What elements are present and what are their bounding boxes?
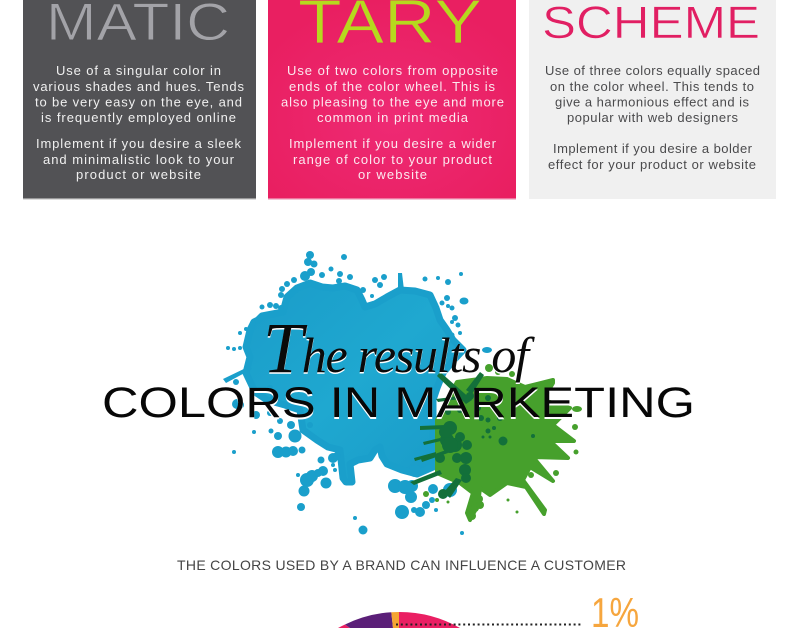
pie slice: pink (399, 612, 460, 628)
text block: complementary description: range of color to your product (293, 152, 492, 167)
icon: dark green overlap marks (410, 372, 535, 499)
icon: green paint splat (423, 364, 582, 520)
text block: monochromatic description (33, 63, 244, 182)
pie slice: orange 1% (391, 612, 399, 628)
text block: monochromatic description: is frequently employed online (41, 110, 236, 125)
pie slice: pink left edge (338, 624, 350, 628)
panel: complementary (268, 0, 516, 200)
text block: complementary description: also pleasing to the eye and more (281, 94, 504, 110)
text block: complementary description: common in print media (317, 110, 469, 125)
text block: triadic description: Implement if you desire a bolder (553, 141, 753, 156)
title script line: The results of: The results of (263, 310, 535, 390)
dotted leader line (396, 624, 581, 626)
text block: monochromatic description: Implement if you desire a sleek (36, 136, 242, 151)
text block: triadic description: popular with web designers (567, 110, 738, 125)
icon: blue paint splat (223, 251, 492, 535)
text block: complementary description (281, 63, 504, 182)
text block: complementary description: Implement if you desire a wider (289, 136, 497, 151)
text block: triadic description: Use of three colors equally spaced (545, 63, 760, 78)
text block: monochromatic description: product or website (76, 167, 201, 182)
text block: triadic description: effect for your product or website (548, 157, 756, 172)
text block: complementary description: ends of the color wheel. This is (289, 79, 496, 94)
text block: monochromatic description: various shades and hues. Tends (33, 79, 244, 94)
panel: triadic scheme (529, 0, 776, 199)
title (102, 308, 695, 429)
subtitle: THE COLORS USED BY A BRAND CAN INFLUENCE A CUSTOMER (177, 557, 626, 573)
text block: triadic description: give a harmonious effect and is (555, 94, 750, 110)
text block: triadic description: on the color wheel. This tends to (550, 79, 754, 94)
pie slice: purple (345, 612, 393, 628)
title script line: The results of: The results of (263, 308, 535, 388)
pie chart (338, 612, 460, 628)
text block: monochromatic description: Use of a singular color in (56, 63, 221, 78)
title main line: COLORS IN MARKETING: COLORS IN MARKETING (102, 382, 695, 429)
text block: monochromatic description: and minimalistic look to your (43, 152, 235, 167)
text block: complementary description: or website (358, 167, 427, 182)
text block: monochromatic description: to be very easy on the eye, and (35, 94, 242, 110)
text block: triadic description (545, 63, 760, 172)
panel: monochromatic (23, 0, 256, 200)
title main line: COLORS IN MARKETING: COLORS IN MARKETING (102, 380, 695, 427)
text block: complementary description: Use of two colors from opposite (287, 63, 498, 78)
